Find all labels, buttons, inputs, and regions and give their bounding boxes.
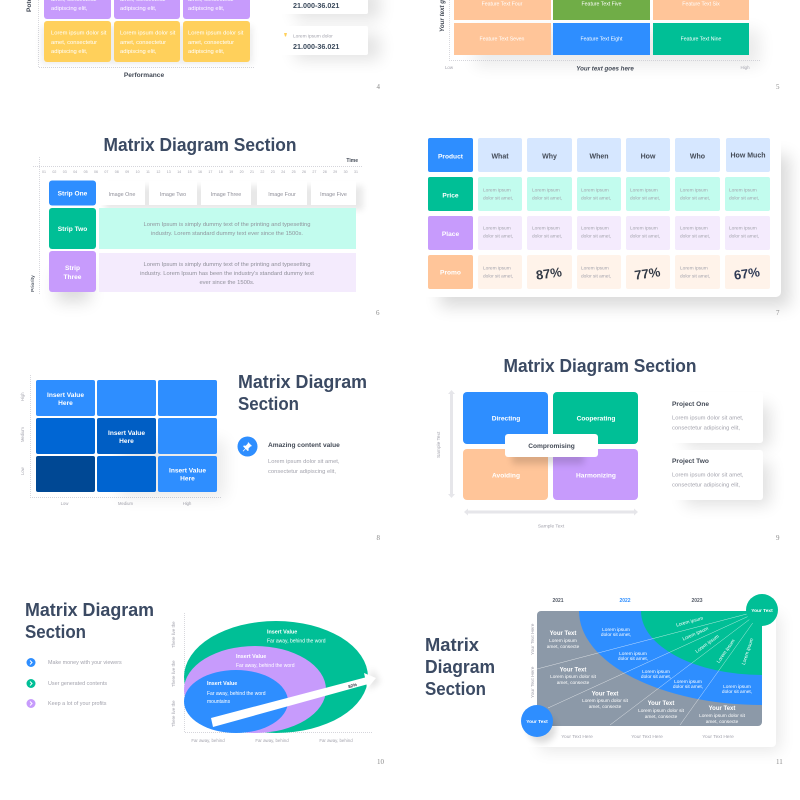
gray region labels: Lorem ipsum dolor sit	[699, 713, 746, 719]
side labels: Your Text Here	[561, 734, 593, 740]
title: Section	[425, 679, 486, 699]
image cards	[56, 181, 363, 302]
row: promo: Promo	[440, 270, 461, 276]
circle: top right: Your Text	[751, 608, 773, 614]
row: place	[428, 216, 770, 250]
title: Section	[25, 622, 86, 642]
card	[525, 600, 780, 751]
timeline numbers: 07	[104, 170, 108, 174]
row: place: dolor sit amet,	[483, 234, 513, 240]
axis: potential and performance: Performance	[124, 72, 164, 79]
row: place: Place	[442, 231, 459, 238]
axis	[439, 0, 760, 72]
row: place: dolor sit amet,	[729, 234, 759, 240]
title: Matrix Diagram	[25, 600, 154, 620]
image cards: Image Four	[268, 192, 296, 198]
value cards: Lorem ipsum dolor	[293, 34, 333, 40]
bullet list: Keep a lot of your profits	[48, 701, 107, 707]
timeline numbers: 11	[146, 170, 150, 174]
green region labels: Lorem ipsum	[741, 638, 755, 666]
matrix cells: yellow row: Lorem ipsum dolor sit	[120, 30, 176, 36]
project cards	[660, 392, 770, 505]
ellipse labels	[207, 630, 326, 705]
row: product: Why	[542, 154, 557, 160]
row: place: dolor sit amet,	[680, 234, 710, 240]
matrix cells	[454, 0, 749, 55]
matrix cells: yellow row: adipiscing elit,	[51, 49, 88, 55]
side labels: Your Text Here	[631, 734, 663, 740]
chart axes: There live the	[171, 660, 176, 687]
timeline numbers: 27	[312, 170, 316, 174]
arrow with value: 82%	[348, 682, 358, 689]
ellipse labels: Far away, behind the word	[236, 663, 295, 669]
strip three: Three	[64, 274, 82, 281]
timeline numbers: 29	[333, 170, 337, 174]
row: place: Lorem ipsum	[483, 226, 511, 232]
title: Diagram	[425, 657, 495, 677]
matrix cells: Feature Text Nine	[681, 36, 722, 42]
title: Section	[238, 394, 299, 414]
project cards: Lorem ipsum dolor sit amet,	[672, 472, 744, 478]
gray region labels: Your Text	[560, 668, 586, 674]
timeline numbers: 25	[292, 170, 296, 174]
row: product: How	[641, 154, 656, 160]
year tabs	[540, 594, 720, 605]
strip three: Strip	[65, 265, 80, 272]
row: product	[428, 138, 770, 172]
row: promo: Lorem ipsum	[680, 266, 708, 272]
image cards: Image Two	[160, 192, 186, 198]
matrix cells: yellow row: amet, consectetur	[120, 40, 166, 46]
matrix axes: High	[20, 392, 25, 401]
row: price: dolor sit amet,	[483, 196, 513, 202]
matrix axes: Medium	[118, 501, 133, 506]
page number: 10	[377, 758, 384, 766]
strip one	[49, 180, 96, 206]
arrows and axis labels: Sample Text	[538, 524, 565, 530]
timeline numbers: 06	[94, 170, 98, 174]
axes	[30, 157, 363, 294]
panel: slide 11	[426, 594, 782, 764]
arrows and axis labels	[436, 390, 638, 530]
icon: pin	[238, 436, 258, 456]
timeline numbers: 30	[344, 170, 348, 174]
blue region labels: dolor sit amet,	[641, 674, 671, 680]
row: place: Lorem ipsum	[729, 226, 757, 232]
blue region labels: dolor sit amet,	[601, 632, 631, 638]
row: product: Who	[690, 154, 705, 160]
timeline numbers: 19	[229, 170, 233, 174]
project cards: consectetur adipiscing elit,	[672, 482, 740, 488]
image cards: Image Three	[211, 192, 241, 198]
text block: Lorem ipsum dolor sit amet,	[268, 459, 340, 465]
timeline numbers: 14	[177, 170, 181, 174]
quadrants: Avoiding	[492, 472, 520, 480]
axis: Your text goes here	[576, 66, 634, 72]
row: place: Lorem ipsum	[630, 226, 658, 232]
panel: slide 8	[20, 372, 380, 542]
axes: Time	[346, 158, 358, 164]
axis: potential and performance	[26, 0, 255, 79]
ellipse labels: Far away, behind the word	[267, 638, 326, 644]
strip three: ever since the 1500s.	[199, 280, 255, 286]
panel: slide 7	[420, 132, 790, 317]
chart axes: Far away, behind	[319, 738, 353, 743]
matrix cells: Feature Text Eight	[580, 36, 623, 42]
row: place: Lorem ipsum	[581, 226, 609, 232]
gray region labels: amet, consecte	[645, 714, 678, 720]
timeline numbers: 24	[281, 170, 285, 174]
blue region labels: dolor sit amet,	[618, 656, 648, 662]
timeline numbers: 03	[63, 170, 67, 174]
row: place: dolor sit amet,	[581, 234, 611, 240]
gray region labels: Your Text	[550, 631, 576, 637]
title	[238, 372, 367, 414]
blue region labels: Lorem ipsum	[674, 679, 702, 685]
timeline numbers: 09	[125, 170, 129, 174]
strip three: industry. Lorem Ipsum has been the industry's standard dummy text	[140, 271, 314, 277]
chart axes: There live the	[171, 700, 176, 727]
strip three: Lorem Ipsum is simply dummy text of the printing and typesetting	[144, 262, 310, 268]
timeline numbers: 31	[354, 170, 358, 174]
matrix cells: Feature Text Four	[482, 2, 523, 8]
project cards: Lorem ipsum dolor sit amet,	[672, 416, 744, 422]
value cards: 21.000-36.021	[293, 42, 339, 51]
title: Matrix	[425, 635, 479, 655]
row: product: When	[589, 154, 609, 160]
gray region labels: Lorem ipsum	[549, 638, 577, 644]
project cards: Project One	[672, 401, 709, 408]
circle: top right	[746, 594, 778, 626]
matrix cells: Here	[119, 438, 134, 445]
row: promo: Lorem ipsum	[581, 266, 609, 272]
blue region labels: Lorem ipsum	[602, 627, 630, 633]
arrow with value	[211, 668, 380, 727]
row: place: Lorem ipsum	[532, 226, 560, 232]
matrix axes: Low	[20, 466, 25, 475]
row: price: Lorem ipsum	[630, 188, 658, 194]
matrix axes: Medium	[20, 427, 25, 442]
timeline numbers: 18	[219, 170, 223, 174]
gray region labels: Lorem ipsum dolor sit	[582, 698, 629, 704]
blue region labels: dolor sit amet,	[673, 684, 703, 690]
gray region labels: amet, consecte	[706, 719, 739, 725]
ellipse labels: Insert Value	[267, 630, 297, 636]
row: price: Lorem ipsum	[532, 188, 560, 194]
arrows and axis labels: Sample Text	[436, 431, 442, 458]
matrix cells: Here	[180, 476, 195, 482]
year tabs: 2023	[691, 598, 703, 604]
circle: bottom left: Your Text	[526, 719, 548, 725]
center label	[505, 434, 598, 464]
blue region labels	[601, 627, 752, 695]
quadrants	[463, 392, 638, 500]
row: promo: dolor sit amet,	[581, 274, 611, 280]
side labels	[530, 623, 734, 740]
gray region labels: Lorem ipsum dolor sit	[550, 674, 597, 680]
panel: slide 10	[25, 600, 384, 766]
matrix cells	[36, 380, 225, 498]
row: price: dolor sit amet,	[680, 196, 710, 202]
bullet list: User generated contents	[48, 681, 107, 687]
page number: 7	[776, 309, 780, 317]
blue region labels: Lorem ipsum	[642, 669, 670, 675]
row: promo: 77%	[633, 264, 662, 283]
page number: 11	[776, 758, 783, 766]
panel: slide 9	[436, 356, 780, 542]
timeline numbers: 15	[188, 170, 192, 174]
row: promo: 67%	[733, 264, 761, 283]
timeline numbers: 12	[156, 170, 160, 174]
gray region labels: Your Text	[648, 701, 674, 707]
blue region labels: dolor sit amet,	[722, 689, 752, 695]
side labels: Your Text Here	[530, 623, 536, 655]
layered matrix	[537, 611, 762, 726]
matrix cells: purple row: adipiscing elit,	[188, 6, 225, 12]
year tabs: 2022	[619, 598, 631, 604]
axes: Priority	[30, 275, 36, 292]
green region labels: Lorem ipsum	[676, 616, 704, 629]
timeline numbers: 01	[42, 170, 46, 174]
row: place: Lorem ipsum	[680, 226, 708, 232]
bullet list: Make money with your viewers	[48, 660, 122, 666]
timeline numbers: 26	[302, 170, 306, 174]
project cards: consectetur adipiscing elit,	[672, 426, 740, 432]
quadrants: Cooperating	[577, 416, 615, 422]
page number: 9	[776, 534, 780, 542]
timeline numbers: 21	[250, 170, 254, 174]
strip two	[49, 208, 356, 249]
row: promo: dolor sit amet,	[483, 274, 513, 280]
row: promo: dolor sit amet,	[680, 274, 710, 280]
ellipse labels: mountains	[207, 699, 231, 705]
row: product: Product	[438, 154, 464, 160]
center label: Compromising	[528, 443, 575, 450]
green region labels: Lorem ipsum	[716, 638, 737, 665]
matrix cells: Feature Text Six	[682, 2, 720, 8]
title	[425, 635, 495, 699]
timeline numbers: 08	[115, 170, 119, 174]
matrix cells: Feature Text Seven	[480, 36, 525, 42]
timeline numbers: 04	[73, 170, 77, 174]
image cards: Image Five	[320, 192, 347, 198]
text block: Amazing content value	[268, 442, 340, 449]
gray region labels: Your Text	[592, 692, 618, 698]
row: price: dolor sit amet,	[630, 196, 660, 202]
green region labels	[676, 616, 755, 666]
matrix cells: purple row	[44, 0, 250, 19]
axis: High	[740, 65, 750, 70]
gray region labels: amet, consecte	[557, 680, 590, 686]
strip two: Lorem Ipsum is simply dummy text of the printing and typesetting	[144, 222, 310, 228]
page number: 5	[776, 83, 780, 91]
panel: slide 6	[30, 135, 380, 317]
page number: 4	[376, 83, 380, 91]
matrix cells: yellow row: Lorem ipsum dolor sit	[188, 30, 244, 36]
axis: Low	[445, 65, 454, 70]
ellipse labels: Insert Value	[207, 681, 237, 687]
quadrants: Harmonizing	[576, 472, 616, 480]
chart axes: There live the	[171, 621, 176, 648]
timeline numbers: 20	[240, 170, 244, 174]
timeline numbers: 02	[52, 170, 56, 174]
side labels: Your Text Here	[702, 734, 734, 740]
matrix cells: Insert Value	[169, 468, 206, 474]
timeline numbers: 17	[208, 170, 212, 174]
panel: slide 5	[439, 0, 780, 91]
timeline numbers: 28	[323, 170, 327, 174]
row: price: dolor sit amet,	[581, 196, 611, 202]
row: place: dolor sit amet,	[532, 234, 562, 240]
ellipse labels: Far away, behind the word	[207, 691, 266, 697]
row: promo	[428, 255, 770, 289]
matrix cells: purple row: adipiscing elit,	[120, 6, 157, 12]
chart axes	[171, 613, 373, 743]
project cards: Project Two	[672, 458, 709, 465]
matrix cells: yellow row: adipiscing elit,	[188, 49, 225, 55]
row: place: dolor sit amet,	[630, 234, 660, 240]
page number: 8	[376, 534, 380, 542]
value cards	[278, 0, 380, 60]
row: promo: Lorem ipsum	[483, 266, 511, 272]
row: product: What	[491, 154, 509, 160]
gray region labels: amet, consecte	[547, 644, 580, 650]
image cards: Image One	[109, 192, 135, 198]
title: Matrix Diagram Section	[504, 356, 696, 376]
row: price: dolor sit amet,	[729, 196, 759, 202]
timeline numbers: 10	[136, 170, 140, 174]
title	[25, 600, 154, 642]
matrix cells: purple row: adipiscing elit,	[51, 6, 88, 12]
strip two: industry. Lorem standard dummy text ever since the 1500s.	[151, 231, 303, 237]
row: price: Lorem ipsum	[680, 188, 708, 194]
row: promo: 87%	[535, 264, 563, 283]
ellipse labels: Insert Value	[236, 654, 266, 660]
quadrants: Directing	[492, 416, 520, 422]
timeline numbers: 23	[271, 170, 275, 174]
row: price	[428, 177, 770, 211]
text block: consectetur adipiscing elit,	[268, 469, 336, 475]
timeline numbers: 16	[198, 170, 202, 174]
matrix cells: yellow row: Lorem ipsum dolor sit	[51, 30, 107, 36]
bullet list	[26, 658, 122, 708]
gray region labels: Your Text	[709, 706, 735, 712]
matrix cells: Insert Value	[47, 392, 84, 399]
circle: bottom left	[521, 705, 556, 743]
green region labels: Lorem ipsum	[682, 626, 709, 642]
matrix cells: yellow row: amet, consectetur	[51, 40, 97, 46]
timeline numbers: 22	[260, 170, 264, 174]
matrix axes: Low	[61, 501, 69, 506]
row: price: Lorem ipsum	[729, 188, 757, 194]
nested ellipses	[184, 621, 368, 733]
gray region labels	[547, 631, 746, 725]
matrix cells: yellow row: adipiscing elit,	[120, 49, 157, 55]
title: Matrix Diagram Section	[104, 135, 296, 155]
row: price: Price	[442, 192, 459, 200]
chart axes: Far away, behind	[255, 738, 289, 743]
title: Matrix Diagram	[238, 372, 367, 392]
matrix axes	[20, 375, 222, 506]
row: price: Lorem ipsum	[483, 188, 511, 194]
gray region labels: amet, consecte	[589, 704, 622, 710]
card	[420, 132, 790, 307]
matrix axes: High	[183, 501, 192, 506]
matrix cells: Feature Text Five	[582, 2, 622, 8]
matrix cells: yellow row: amet, consectetur	[188, 40, 234, 46]
row: price: Lorem ipsum	[581, 188, 609, 194]
row: price: dolor sit amet,	[532, 196, 562, 202]
timeline numbers: 13	[167, 170, 171, 174]
timeline numbers	[42, 170, 358, 174]
strip one: Strip One	[58, 190, 88, 198]
strip three	[49, 251, 356, 292]
year tabs: 2021	[552, 598, 564, 604]
gray region labels: Lorem ipsum dolor sit	[638, 708, 685, 714]
side labels: Your Text Here	[530, 666, 536, 698]
text block	[268, 442, 340, 475]
timeline numbers: 05	[84, 170, 88, 174]
matrix cells: Here	[58, 400, 73, 407]
blue region labels: Lorem ipsum	[723, 684, 751, 690]
matrix cells: Insert Value	[108, 430, 145, 437]
panel: slide 4	[26, 0, 380, 91]
matrix cells: yellow row	[41, 21, 253, 64]
strip two: Strip Two	[58, 226, 87, 233]
green region labels: Lorem ipsum	[694, 634, 720, 655]
blue region labels: Lorem ipsum	[619, 651, 647, 657]
page number: 6	[376, 309, 380, 317]
value cards: 21.000-36.021	[293, 1, 339, 10]
chart axes: Far away, behind	[191, 738, 225, 743]
row: product: How Much	[730, 152, 766, 160]
